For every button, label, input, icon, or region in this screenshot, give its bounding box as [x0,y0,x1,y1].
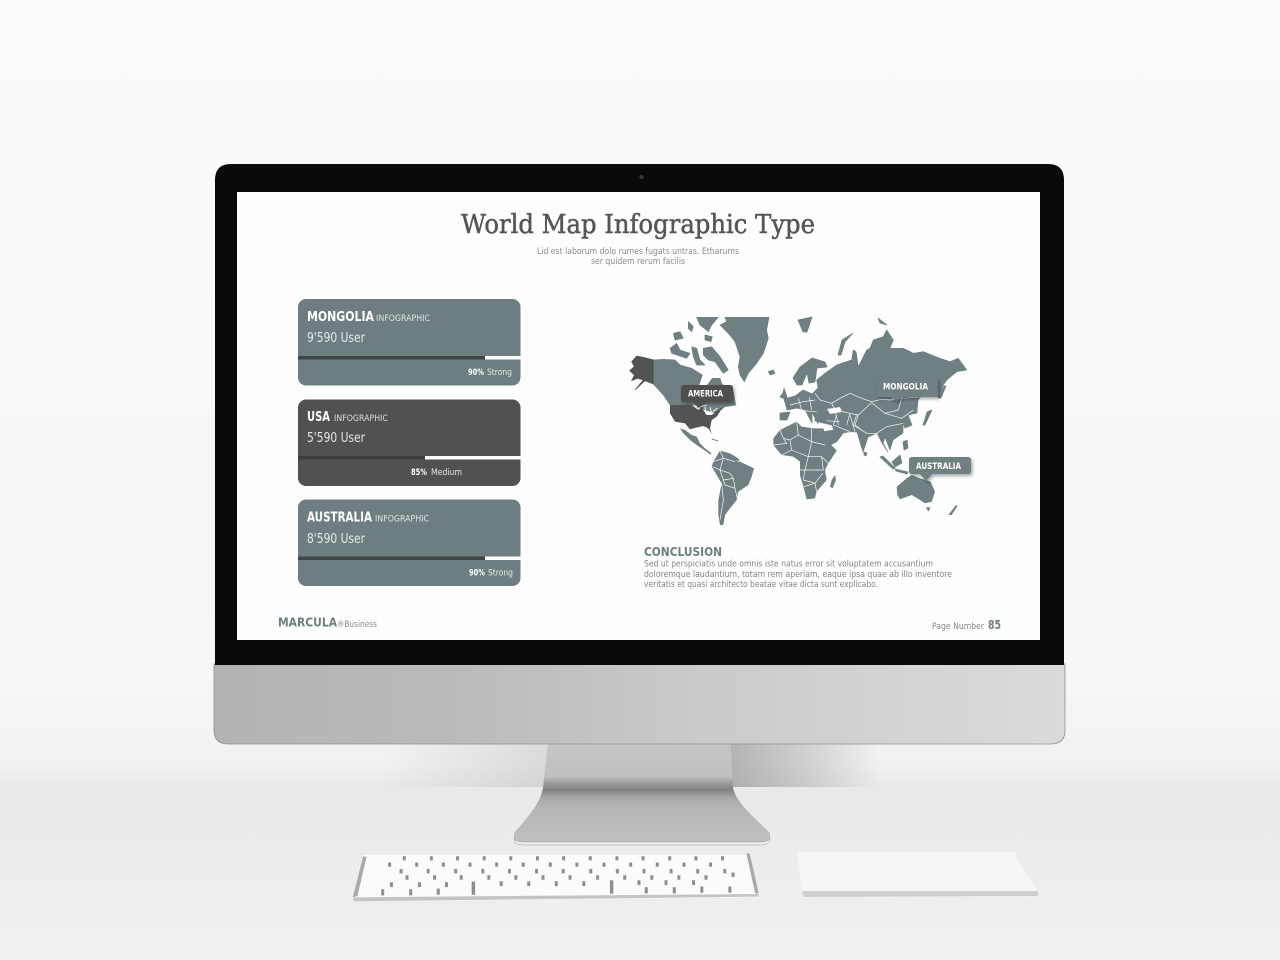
Central America [680,428,718,454]
rating [469,568,513,578]
card heading [307,310,430,325]
footer brand [278,616,377,630]
card heading [307,510,429,526]
North America land [653,317,775,413]
webcam [639,175,644,179]
rating: Strong [488,568,513,578]
user count: 5'590 User [307,431,366,446]
progress bar [298,356,520,360]
rating: Medium [431,468,462,478]
card heading [307,410,388,425]
map label: Australia [909,457,971,481]
subtitle [537,247,739,267]
panel: USA card [298,400,520,486]
conclusion text: veritatis et quasi architecto beatae vitae dicta sunt explicabo. [644,580,878,590]
footer brand: ®Business [337,620,377,630]
Africa [773,422,837,499]
Eurasia [780,317,967,474]
Alaska (highlighted) [630,356,653,390]
panel: Australia card [298,500,520,586]
progress bar [298,556,520,560]
monitor stand [514,743,770,845]
card heading: AUSTRALIA [307,510,372,526]
map label: Mongolia [877,378,938,401]
rating: 85% [411,468,427,478]
South America [712,451,754,525]
Australia [897,475,958,515]
subtitle: Lid est laborum dolo rumes fugats untras. Etharums [537,247,739,257]
monitor chin [214,664,1065,744]
contiguous USA (highlighted) [670,405,722,434]
monitor [214,164,1065,744]
Asian and European borders [790,393,927,430]
map label: America: AMERICA [688,390,723,400]
rating: Strong [487,368,512,378]
screen [237,192,1040,640]
conclusion text [644,560,952,590]
card heading: USA [307,410,330,425]
monitor bezel [215,164,1064,665]
trackpad [797,852,1038,897]
rating: 90% [469,568,485,578]
map label: Australia: AUSTRALIA [916,462,961,472]
user count: 9'590 User [307,331,366,346]
conclusion text: doloremque laudantium, totam rem aperiam, eaque ipsa quae ab illo inventore [644,570,952,580]
progress bar [298,456,520,460]
card heading: MONGOLIA [307,310,374,325]
world map [630,317,967,525]
page number: 85 [988,618,1001,632]
panel: Mongolia card [298,299,520,386]
footer brand: MARCULA [278,616,338,630]
user count: 8'590 User [307,532,366,547]
page number: Page Number [932,622,984,632]
subtitle: ser quidem rerum facilis [591,257,685,267]
title: World Map Infographic Type [461,210,815,240]
rating [468,368,512,378]
page number [932,618,1001,632]
card heading: INFOGRAPHIC [375,514,429,524]
conclusion text: Sed ut perspiciatis unde omnis iste natus error sit voluptatem accusantium [644,560,933,570]
rating [411,468,462,478]
map label: Mongolia: MONGOLIA [883,382,928,392]
conclusion heading: CONCLUSION [644,544,722,559]
card heading: INFOGRAPHIC [376,314,430,324]
map label: America [681,385,733,408]
card heading: INFOGRAPHIC [334,414,388,424]
rating: 90% [468,368,484,378]
keyboard [353,853,760,902]
